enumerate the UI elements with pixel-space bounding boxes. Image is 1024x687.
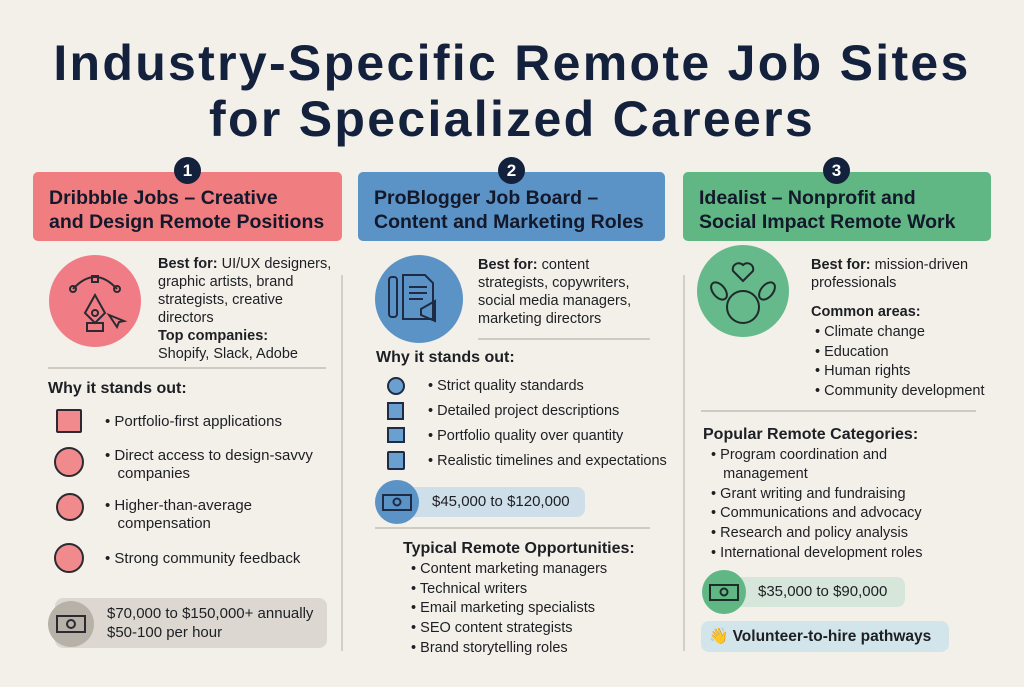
list: why 1: • Direct access to design-savvy: [105, 447, 313, 464]
list: why 1: • Higher-than-average: [105, 497, 252, 514]
text: best for 3: [811, 257, 968, 291]
number 1: [174, 157, 201, 184]
list: typical opportunities: • Technical writers: [411, 581, 527, 597]
list: common areas: • Community development: [815, 383, 985, 399]
list: typical opportunities: Typical Remote Opportunities:: [403, 540, 635, 557]
heading: why 2: Why it stands out:: [376, 349, 515, 366]
text: best for 1: Shopify, Slack, Adobe: [158, 346, 298, 362]
text: best for 2: social media managers,: [478, 293, 631, 309]
text: best for 2: Best for: content: [478, 257, 589, 273]
text: salary 1: [107, 605, 314, 641]
list: why 1: [54, 409, 313, 573]
icon: pen tool: [49, 255, 141, 347]
header 2: Content and Marketing Roles: [374, 211, 644, 233]
header 2: ProBlogger Job Board –: [374, 187, 598, 209]
icon: money hand: [56, 493, 84, 521]
list: why 2: • Detailed project descriptions: [428, 403, 619, 419]
list: why 1: • Strong community feedback: [105, 550, 300, 567]
text: best for 2: [478, 257, 631, 327]
list: why 2: • Strict quality standards: [428, 378, 584, 394]
list: common areas: Common areas:: [811, 304, 921, 320]
list: popular categories: [703, 426, 922, 561]
text: best for 1: Top companies:: [158, 328, 268, 344]
text: salary 1: $70,000 to $150,000+ annually: [107, 605, 313, 622]
number 2: 2: [507, 161, 516, 180]
text: best for 1: strategists, creative: [158, 292, 283, 308]
callout: volunteer: 👋 Volunteer-to-hire pathways: [709, 628, 931, 645]
text: $45,000 to $120,000: [432, 493, 570, 510]
list: common areas: • Education: [815, 344, 889, 360]
title: [53, 35, 971, 147]
header 2: [358, 172, 665, 241]
list: common areas: [811, 304, 985, 399]
list: common areas: • Human rights: [815, 363, 910, 379]
icon: document megaphone: [375, 255, 463, 343]
list: popular categories: • Grant writing and fundraising: [711, 486, 906, 502]
text: best for 3: professionals: [811, 275, 896, 291]
list: typical opportunities: • Email marketing specialists: [411, 600, 595, 616]
list: why 1: compensation: [118, 515, 211, 532]
icon: globe heart: [697, 245, 789, 337]
list: why 2: • Realistic timelines and expectations: [428, 453, 667, 469]
header 3: Social Impact Remote Work: [699, 211, 955, 233]
text: salary 1: $50-100 per hour: [107, 624, 222, 641]
salary 2: [385, 487, 585, 517]
salary 1: [55, 598, 327, 648]
list: common areas: • Climate change: [815, 324, 925, 340]
number 1: 1: [183, 161, 192, 180]
list: why 2: • Portfolio quality over quantity: [428, 428, 623, 444]
header 1: and Design Remote Positions: [49, 211, 324, 233]
heading: why 1: Why it stands out:: [48, 380, 187, 397]
icon: dribbble ball: [54, 447, 84, 477]
list: popular categories: • Communications and advocacy: [711, 505, 922, 521]
title: Industry-Specific Remote Job Sites: [53, 35, 971, 91]
list: popular categories: management: [723, 466, 808, 482]
text: best for 1: Best for: UI/UX designers,: [158, 256, 331, 272]
icon: thumbs up: [54, 543, 84, 573]
list: why 1: companies: [118, 465, 190, 482]
list: popular categories: • Research and policy analysis: [711, 525, 908, 541]
list: popular categories: Popular Remote Categories:: [703, 426, 918, 443]
text: best for 1: [158, 256, 331, 362]
text: best for 3: Best for: mission-driven: [811, 257, 968, 273]
list: typical opportunities: • Content marketing managers: [411, 561, 607, 577]
list: typical opportunities: • Brand storytelling roles: [411, 640, 568, 656]
list: typical opportunities: [403, 540, 635, 656]
list: typical opportunities: • SEO content strategists: [411, 620, 572, 636]
icon: portfolio: [56, 409, 82, 433]
header 3: Idealist – Nonprofit and: [699, 187, 916, 209]
title: for Specialized Careers: [209, 91, 815, 147]
text: best for 1: directors: [158, 310, 214, 326]
header 1: Dribbble Jobs – Creative: [49, 187, 278, 209]
text: $35,000 to $90,000: [758, 583, 887, 600]
text: best for 2: marketing directors: [478, 311, 601, 327]
text: best for 1: graphic artists, brand: [158, 274, 293, 290]
list: popular categories: • International development roles: [711, 545, 922, 561]
text: best for 2: strategists, copywriters,: [478, 275, 630, 291]
list: why 1: • Portfolio-first applications: [105, 413, 282, 430]
header 3: [683, 172, 991, 241]
salary 3: [710, 577, 905, 607]
list: why 2: [387, 377, 667, 470]
list: popular categories: • Program coordination and: [711, 447, 887, 463]
number 3: [823, 157, 850, 184]
panel: Dribbble: [33, 157, 343, 657]
number 3: 3: [832, 161, 841, 180]
header 1: [33, 172, 342, 241]
callout: volunteer: [701, 621, 949, 652]
number 2: [498, 157, 525, 184]
